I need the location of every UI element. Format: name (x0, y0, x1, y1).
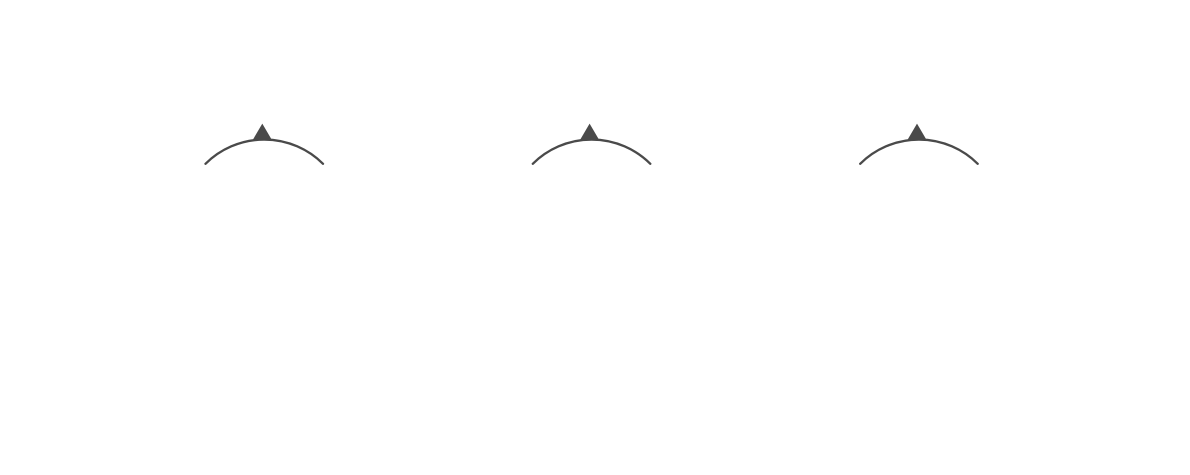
icon: gauge arc with pointer 3 (860, 124, 978, 164)
icon: gauge arc with pointer 2 (533, 124, 650, 164)
icon: gauge arc with pointer 1 (206, 124, 323, 164)
